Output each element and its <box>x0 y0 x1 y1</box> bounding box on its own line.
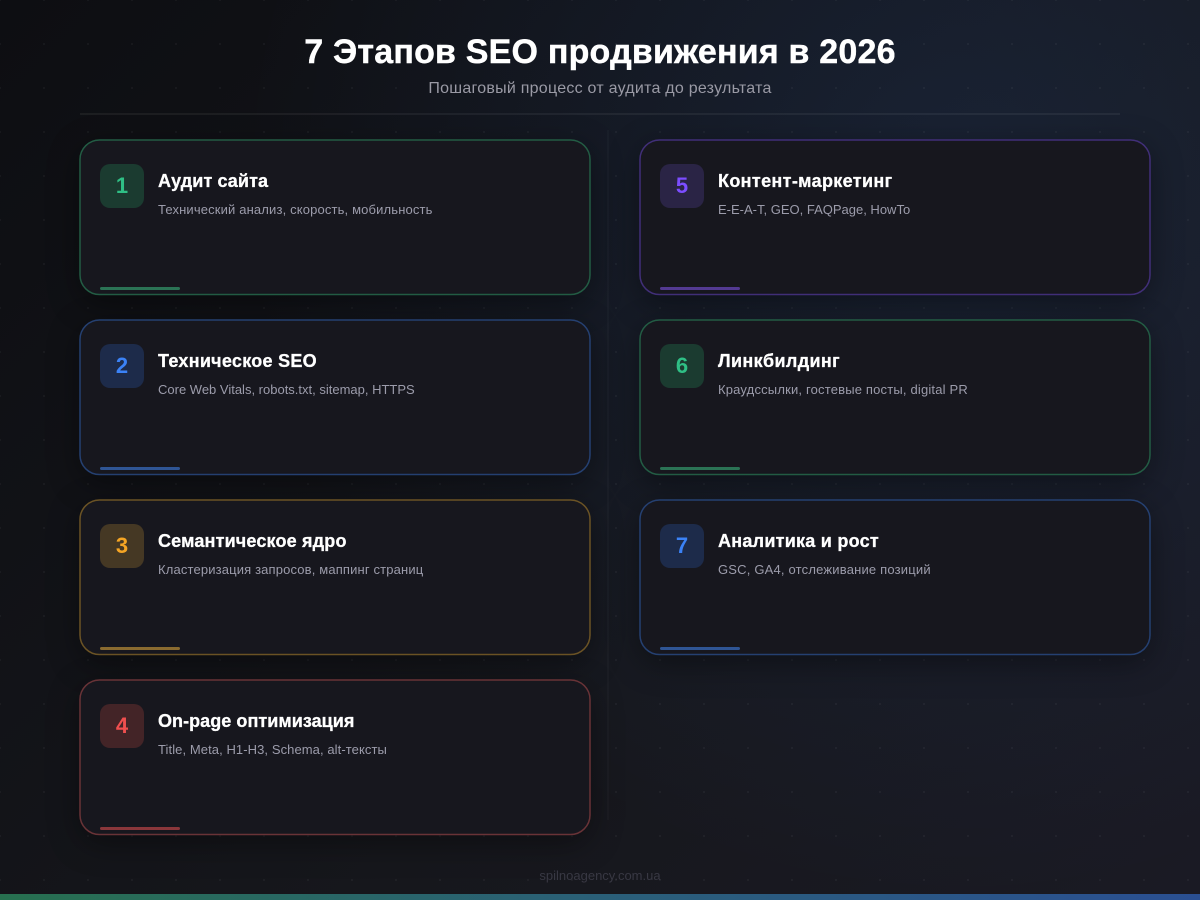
badge 6: 6 <box>676 353 688 378</box>
badge 5 <box>660 164 704 208</box>
title: 7 Этапов SEO продвижения в 2026 <box>304 33 896 71</box>
step 7 description: GSC, GA4, отслеживание позиций <box>718 562 931 577</box>
panel: step 7 <box>640 500 1150 655</box>
step 6 heading: Линкбилдинг <box>718 351 840 371</box>
bottom gradient strip <box>0 894 1200 900</box>
step 5 description: E-E-A-T, GEO, FAQPage, HowTo <box>718 202 910 217</box>
step 4 accent bar <box>100 827 180 830</box>
step 1 description: Технический анализ, скорость, мобильность <box>158 202 433 217</box>
panel: step 6 <box>640 320 1150 475</box>
panel: step 4 <box>80 680 590 835</box>
panel: step 2 <box>80 320 590 475</box>
badge 4 <box>100 704 144 748</box>
step 2 description: Core Web Vitals, robots.txt, sitemap, HTTPS <box>158 382 415 397</box>
step 4 heading: On-page оптимизация <box>158 711 354 731</box>
step 6 description: Краудссылки, гостевые посты, digital PR <box>718 382 968 397</box>
footer source: spilnoagency.com.ua <box>539 868 661 883</box>
badge 3 <box>100 524 144 568</box>
badge 5: 5 <box>676 173 688 198</box>
step 1 accent bar <box>100 287 180 290</box>
badge 2: 2 <box>116 353 128 378</box>
step 7 heading: Аналитика и рост <box>718 531 879 551</box>
step 2 heading: Техническое SEO <box>158 351 317 371</box>
panel: step 3 <box>80 500 590 655</box>
badge 2 <box>100 344 144 388</box>
badge 1: 1 <box>116 173 128 198</box>
badge 1 <box>100 164 144 208</box>
step 5 accent bar <box>660 287 740 290</box>
badge 7 <box>660 524 704 568</box>
badge 6 <box>660 344 704 388</box>
step 1 heading: Аудит сайта <box>158 171 268 191</box>
step 3 description: Кластеризация запросов, маппинг страниц <box>158 562 423 577</box>
step 2 accent bar <box>100 467 180 470</box>
step 7 accent bar <box>660 647 740 650</box>
badge 7: 7 <box>676 533 688 558</box>
step 3 accent bar <box>100 647 180 650</box>
step 4 description: Title, Meta, H1-H3, Schema, alt-тексты <box>158 742 387 757</box>
panel: step 5 <box>640 140 1150 295</box>
step 3 heading: Семантическое ядро <box>158 531 347 551</box>
step 6 accent bar <box>660 467 740 470</box>
badge 3: 3 <box>116 533 128 558</box>
subtitle: Пошаговый процесс от аудита до результата <box>428 80 772 97</box>
badge 4: 4 <box>116 713 128 738</box>
panel: step 1 <box>80 140 590 295</box>
step 5 heading: Контент-маркетинг <box>718 171 892 191</box>
